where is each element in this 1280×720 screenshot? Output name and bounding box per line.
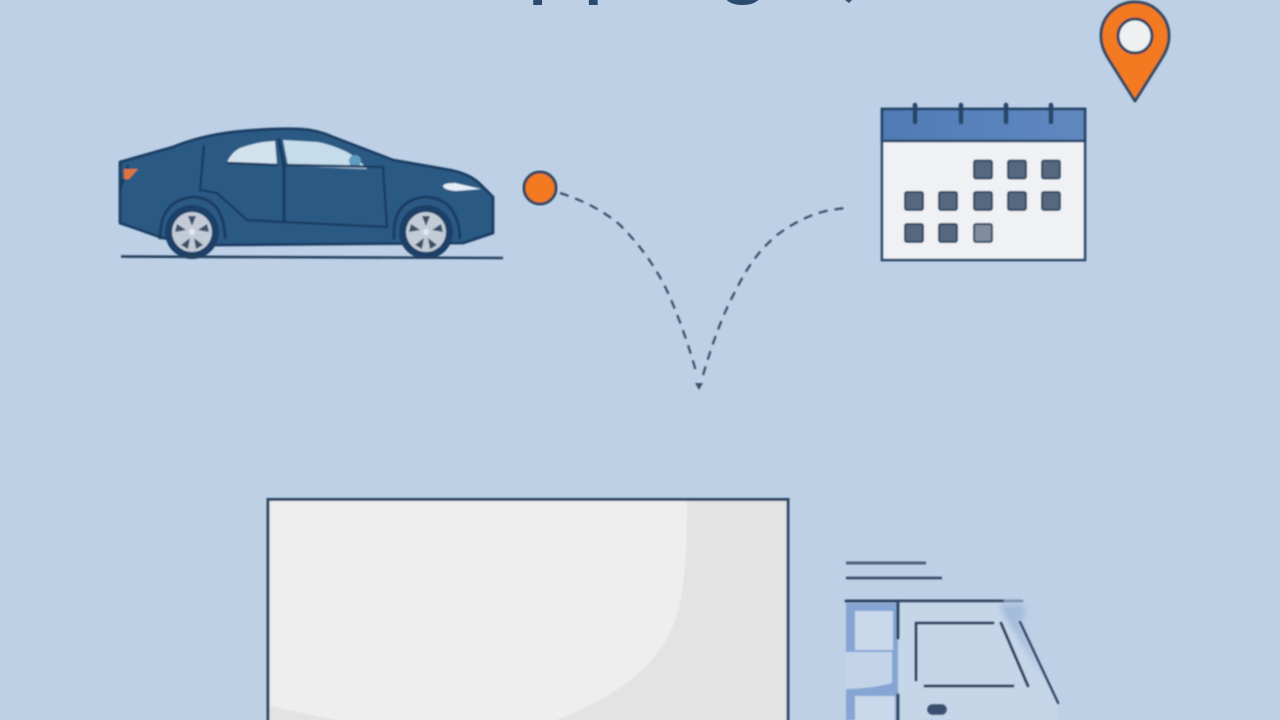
truck — [846, 563, 1058, 720]
car door and panel lines — [120, 140, 460, 238]
front wheel — [399, 205, 453, 259]
panel — [268, 500, 788, 720]
calendar header — [882, 109, 1085, 141]
speed lines — [846, 562, 926, 564]
ground line — [121, 256, 503, 258]
location pin — [1101, 2, 1169, 101]
calendar — [882, 105, 1085, 260]
panel highlight — [270, 501, 687, 720]
dashed arrow — [560, 193, 849, 390]
calendar days — [905, 160, 1060, 242]
truck cab — [898, 602, 1058, 720]
orange dot — [524, 172, 556, 204]
truck body panels — [846, 603, 898, 720]
truck outline — [846, 601, 1058, 720]
car — [120, 129, 503, 259]
rear wheel — [165, 205, 219, 259]
car lights — [124, 169, 481, 191]
calendar rings — [915, 105, 1051, 122]
truck door handle — [927, 704, 947, 715]
car body — [120, 129, 493, 245]
calendar page — [882, 109, 1085, 260]
truck window — [916, 623, 1028, 686]
car windows — [227, 140, 367, 169]
cab shading — [1000, 604, 1045, 680]
